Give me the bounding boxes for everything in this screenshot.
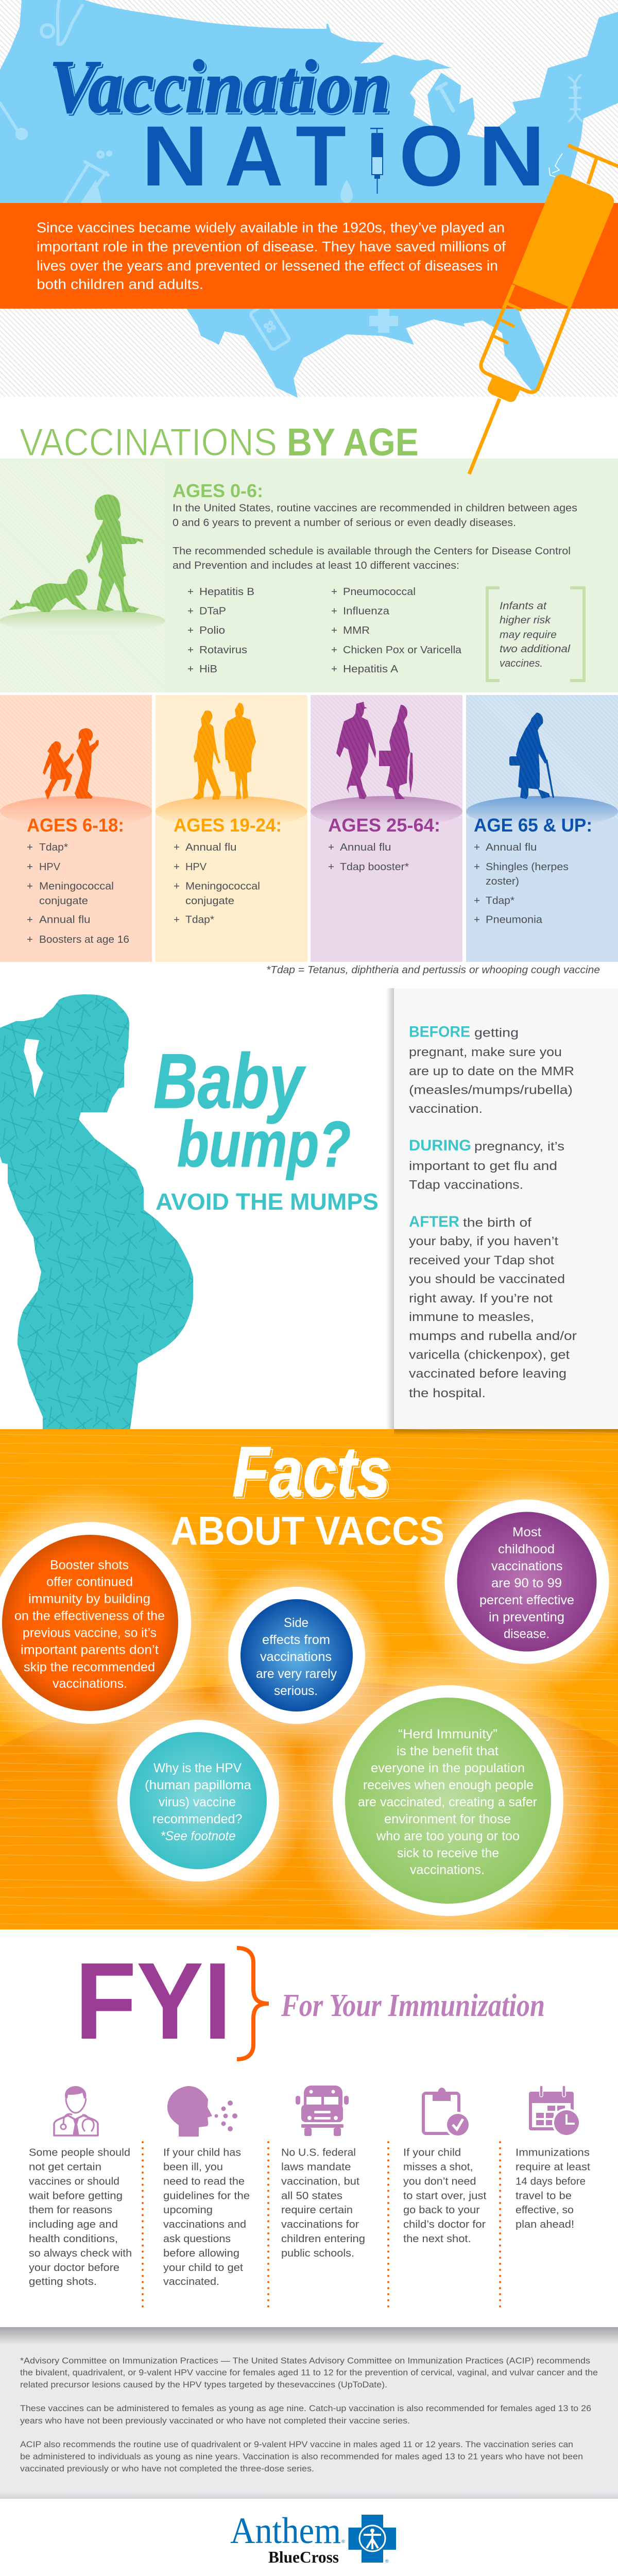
text: been ill, you [163, 2161, 223, 2173]
fact bubble: side effects: vaccinations [260, 1650, 332, 1664]
fact bubble: effectiveness: childhood [498, 1542, 555, 1556]
text: during: important to get flu and [409, 1159, 557, 1173]
brace [237, 1948, 269, 2059]
illustration: ground and children [0, 495, 165, 632]
title: NATION: A [225, 109, 283, 204]
panel: age 65 and up [466, 695, 618, 962]
list: + [27, 861, 33, 873]
callout: infants at higher risk: vaccines. [500, 657, 543, 669]
list: Tdap* [486, 894, 514, 907]
fact bubble: booster shots: previous vaccine, so it’s [23, 1626, 157, 1640]
list: Tdap* [185, 914, 214, 926]
fact bubble: HPV [117, 1720, 279, 1882]
list [27, 841, 129, 945]
text: require at least [516, 2161, 590, 2173]
text: during: DURING [409, 1137, 471, 1154]
text: after: varicella (chickenpox), get [409, 1348, 570, 1362]
list: vaccines column 1: DTaP [199, 605, 226, 617]
list: vaccines column 1: + [187, 586, 194, 598]
subheading: avoid the mumps: AVOID THE MUMPS [156, 1189, 379, 1215]
silhouette: older woman with cane [509, 713, 554, 799]
list: + [27, 914, 33, 926]
fact bubble: side effects: serious. [274, 1684, 318, 1698]
heading: facts: Facts [234, 1434, 392, 1514]
list: + [27, 841, 33, 853]
text: ACIP footnote: vaccinated previously or who have not completed the three-dose series. [20, 2464, 314, 2473]
panel: ages 0-6 [0, 459, 618, 692]
fact bubble: booster shots: immunity by building [28, 1592, 150, 1606]
illustration: large syringe [469, 145, 618, 474]
list: Boosters at age 16 [39, 934, 129, 945]
text: intro: both children and adults. [37, 276, 203, 292]
fact bubble: side effects [228, 1587, 365, 1724]
list: Tdap booster* [340, 861, 409, 873]
text: after: the birth of [463, 1216, 531, 1230]
text [403, 2147, 487, 2245]
Chesapeake bay [549, 154, 562, 177]
list: HPV [185, 861, 207, 873]
text: getting shots. [29, 2276, 97, 2287]
fact bubble: side effects: Side [284, 1616, 308, 1630]
band: orange intro [0, 203, 618, 309]
list: Annual flu [340, 841, 391, 853]
map of the United States [0, 0, 618, 398]
list: vaccines column 2: MMR [343, 624, 370, 636]
text: effective, so [516, 2204, 574, 2216]
silhouette: young adults [193, 703, 256, 800]
text: children entering [281, 2233, 365, 2245]
title: NATION: O [399, 109, 464, 204]
column: child has been ill [163, 2086, 250, 2287]
fact bubble: booster shots: on the effectiveness of the [14, 1609, 165, 1623]
text: 14 days before [516, 2176, 586, 2188]
text: before allowing [163, 2247, 239, 2259]
list: vaccines column 1: HiB [199, 663, 217, 675]
text: them for reasons [29, 2204, 112, 2216]
text: ages 0-6 description: The recommended schedule is available through the Centers for Disease Control [173, 545, 571, 557]
title: Vaccination: Vaccination [52, 47, 392, 130]
text: Immunizations [516, 2147, 590, 2159]
silhouette: two girls [43, 728, 99, 800]
fact bubble: herd immunity: vaccinations. [410, 1863, 485, 1877]
text [28, 2147, 132, 2287]
list: + [474, 861, 480, 873]
text: go back to your [403, 2204, 480, 2216]
heading: vaccinations by age: VACCINATIONS [20, 420, 277, 464]
text: your doctor before [29, 2262, 119, 2274]
list: vaccines column 1: Rotavirus [199, 644, 247, 656]
list: vaccines column 2: + [331, 644, 337, 656]
list: vaccines column 1: Polio [199, 624, 225, 636]
text: including age and [29, 2218, 118, 2230]
text: vaccinated. [163, 2276, 219, 2287]
heading: facts [233, 1447, 391, 1499]
list: + [174, 861, 180, 873]
heading: AGES 19-24: [174, 815, 282, 836]
fact bubble: herd immunity: are vaccinated, creating a safer [358, 1795, 537, 1809]
text: after: your baby, if you haven’t [409, 1234, 558, 1248]
fact bubble: effectiveness: vaccinations [491, 1559, 562, 1573]
text: before: are up to date on the MMR [409, 1064, 574, 1078]
text: intro [37, 219, 506, 292]
heading: AGES 6-18: [27, 815, 124, 836]
list: vaccines column 2: Chicken Pox or Varicella [343, 644, 462, 656]
logo: Anthem BlueCross: BlueCross [268, 2548, 339, 2566]
text: child’s doctor for [403, 2218, 486, 2230]
text: ages 0-6 description: and Prevention and includes at least 10 different vaccines: [173, 560, 459, 571]
list: conjugate [185, 895, 234, 907]
list: vaccines column 1: + [187, 663, 194, 675]
text: all 50 states [281, 2190, 342, 2202]
list: Shingles (herpes [486, 861, 569, 873]
text: vaccination, but [281, 2176, 359, 2188]
text: intro: important role in the prevention of disease. They have saved millions of [37, 239, 506, 255]
text: If your child [403, 2147, 461, 2159]
callout: infants at higher risk: Infants at [500, 600, 547, 612]
text: after: you should be vaccinated [409, 1273, 565, 1286]
list: + [174, 880, 180, 892]
heading: FYI: FYI [75, 1940, 232, 2062]
text: upcoming [163, 2204, 213, 2216]
text: after: immune to measles, [409, 1310, 534, 1324]
text: Some people should [29, 2147, 130, 2159]
fact bubble: HPV: virus) vaccine [159, 1795, 236, 1809]
column: some people [28, 2086, 132, 2287]
silhouette: adult couple [336, 702, 413, 799]
list: vaccines column 1 [187, 586, 254, 675]
title: NATION: N [141, 109, 208, 204]
heading: baby bump: bump? [177, 1109, 351, 1180]
text: you don’t need [403, 2176, 476, 2188]
decorative medical icons [0, 0, 582, 350]
text: ages 0-6 description [173, 502, 577, 571]
list: Annual flu [39, 914, 91, 926]
list: vaccines column 1: + [187, 644, 194, 656]
icon: syringe letter I [370, 128, 383, 194]
fact bubble: effectiveness [445, 1499, 609, 1664]
list: vaccines column 2: + [331, 624, 337, 636]
list: HPV [39, 861, 60, 873]
text: vaccines or should [29, 2176, 119, 2188]
fact bubble: herd immunity: “Herd Immunity” [398, 1727, 497, 1741]
fact bubble: HPV: *See footnote [161, 1829, 236, 1843]
list: + [474, 914, 480, 926]
text: before: pregnant, make sure you [409, 1045, 562, 1059]
callout: infants at higher risk: may require [500, 629, 557, 641]
fact bubble: herd immunity: everyone in the population [371, 1761, 525, 1775]
text: after [409, 1213, 577, 1400]
text [163, 2147, 250, 2287]
list: vaccines column 2: + [331, 663, 337, 675]
fact bubble: effectiveness: disease. [504, 1627, 550, 1641]
text: public schools. [281, 2247, 354, 2259]
text: during [409, 1137, 564, 1192]
list: + [474, 841, 480, 853]
text: laws mandate [281, 2161, 351, 2173]
text: after: AFTER [409, 1213, 459, 1230]
text: ACIP footnote: years who have not been previously vaccinated or who have not completed their vaccine series. [20, 2416, 410, 2426]
fact bubble: herd immunity: environment for those [384, 1812, 511, 1826]
text: ACIP footnote: These vaccines can be administered to females as young as age nine. Catch-up vaccination is also recommended for females aged 13 to 26 [20, 2403, 591, 2413]
list: vaccines column 1: Hepatitis B [199, 586, 254, 598]
fact bubble: booster shots: important parents don’t [21, 1643, 159, 1657]
fact bubble: effectiveness: are 90 to 99 [491, 1576, 562, 1590]
heading: about vaccs: ABOUT VACCS [170, 1508, 444, 1553]
list: vaccines column 2: Pneumococcal [343, 586, 416, 598]
text: after: vaccinated before leaving [409, 1367, 566, 1381]
list: Annual flu [185, 841, 237, 853]
list: zoster) [486, 875, 519, 887]
text: travel to be [516, 2190, 572, 2202]
logo: Anthem BlueCross: ® [341, 2539, 345, 2544]
heading: AGE 65 & UP: [474, 815, 592, 836]
text: before: (measles/mumps/rubella) [409, 1083, 573, 1097]
icon: head sneezing [167, 2086, 237, 2137]
text: before: BEFORE [409, 1024, 470, 1041]
text: intro: lives over the years and prevented or lessened the effect of diseases in [37, 258, 498, 274]
text: If your child has [163, 2147, 241, 2159]
fact bubble: effectiveness: in preventing [489, 1610, 564, 1624]
title: NATION [141, 109, 545, 204]
fact bubble: effectiveness: Most [512, 1525, 541, 1539]
text: require certain [281, 2204, 353, 2216]
list [474, 841, 569, 926]
list: Meningococcal [185, 880, 260, 892]
list: + [328, 841, 334, 853]
panel: ages 6-18 [0, 695, 152, 962]
text: after: right away. If you’re not [409, 1292, 553, 1306]
panel: pregnancy guidance [386, 988, 618, 1429]
fact bubble: herd immunity: who are too young or too [376, 1829, 520, 1843]
list: vaccines column 2 [331, 586, 462, 675]
list: Meningococcal [39, 880, 114, 892]
text [281, 2147, 365, 2259]
icon: school bus [296, 2086, 349, 2136]
icon: medical cross [369, 309, 398, 333]
fact bubble: HPV: (human papilloma [145, 1778, 251, 1792]
fact bubble: herd immunity: is the benefit that [397, 1744, 499, 1758]
text: your child to get [163, 2262, 243, 2274]
title: NATION: T [296, 109, 346, 204]
text: after: the hospital. [409, 1386, 486, 1400]
panel: ages 19-24 [156, 695, 307, 962]
text: need to read the [163, 2176, 245, 2188]
text [516, 2147, 590, 2230]
list: conjugate [39, 895, 88, 907]
footnote: Tdap definition: *Tdap = Tetanus, diphtheria and pertussis or whooping cough vaccine [266, 964, 600, 976]
text: the next shot. [403, 2233, 471, 2245]
heading: AGES 25-64: [328, 815, 440, 836]
fact bubble: HPV: Why is the HPV [153, 1761, 242, 1775]
fact bubble: side effects: are very rarely [256, 1667, 337, 1681]
fact bubble: booster shots [0, 1522, 191, 1724]
panel: ages 25-64 [311, 695, 462, 962]
heading: ages 0-6: AGES 0-6: [173, 480, 263, 501]
title: NATION: N [478, 109, 545, 204]
panel: hero [0, 0, 618, 398]
text: ACIP footnote: be administered to individuals as young as nine years. Vaccination is also recommended for males aged 13 to 21 years who have not been [20, 2452, 583, 2462]
fact bubble: booster shots: offer continued [46, 1574, 133, 1589]
icon: doctor [54, 2086, 98, 2136]
text: so always check with [29, 2247, 132, 2259]
text: during: Tdap vaccinations. [409, 1178, 523, 1192]
text: ACIP footnote: ACIP also recommends the routine use of quadrivalent or 9-valent HPV vaccine in males aged 11 or 12 years. The vaccination series can [20, 2439, 573, 2449]
list: + [328, 861, 334, 873]
title: Vaccination: Vaccination [49, 45, 390, 128]
text: health conditions, [29, 2233, 118, 2245]
heading: vaccinations by age: BY AGE [287, 420, 419, 464]
logo: Anthem BlueCross: Anthem [230, 2510, 341, 2551]
list: vaccines column 1: + [187, 624, 194, 636]
text: ACIP footnote [20, 2355, 598, 2473]
text: to start over, just [403, 2190, 487, 2202]
column: travel [516, 2086, 590, 2230]
icon: clipboard with check [423, 2088, 471, 2138]
fact bubble: herd immunity: sick to receive the [397, 1846, 499, 1860]
text: ACIP footnote: the bivalent, quadrivalent, or 9-valent HPV vaccine for females aged 11 to 12 for the prevention of cervical, vaginal, and vulvar cancer and the [20, 2368, 598, 2378]
callout: infants at higher risk: two additional [500, 643, 571, 655]
heading: baby bump [153, 1038, 351, 1180]
list: + [174, 841, 180, 853]
fact bubble: booster shots: skip the recommended [24, 1660, 155, 1674]
text: No U.S. federal [281, 2147, 356, 2159]
text: misses a shot, [403, 2161, 473, 2173]
text: wait before getting [28, 2190, 123, 2202]
column: missed shot [403, 2088, 487, 2245]
text: ACIP footnote: related precursor lesions caused by the HPV types targeted by thesevaccines (UpToDate). [20, 2380, 387, 2389]
column: federal laws [281, 2086, 365, 2259]
text: plan ahead! [516, 2218, 574, 2230]
fact bubble: herd immunity [333, 1685, 563, 1916]
panel: facts about vaccs [0, 1429, 618, 1929]
text: ages 0-6 description: In the United States, routine vaccines are recommended in children between ages [173, 502, 577, 514]
text: after: received your Tdap shot [409, 1253, 554, 1267]
text: during: pregnancy, it’s [474, 1140, 564, 1154]
list: + [174, 914, 180, 926]
list [328, 841, 409, 873]
list: vaccines column 2: + [331, 605, 337, 617]
text: before [409, 1024, 574, 1116]
illustration: pregnant woman silhouette [0, 994, 193, 1429]
text: ask questions [163, 2233, 231, 2245]
callout: infants at higher risk: higher risk [500, 614, 552, 626]
heading: facts: Facts [232, 1432, 390, 1512]
list: Pneumonia [486, 914, 543, 926]
fact bubble: booster shots: vaccinations. [53, 1676, 127, 1691]
callout: infants at higher risk [487, 588, 584, 681]
fact bubble: booster shots: Booster shots [50, 1558, 129, 1572]
heading: baby bump: Baby [153, 1038, 306, 1124]
list: + [474, 894, 480, 907]
subheading: for your immunization: For Your Immunization [281, 1988, 545, 2023]
list: vaccines column 2: Hepatitis A [343, 663, 398, 675]
text: intro: Since vaccines became widely available in the 1920s, they’ve played an [37, 219, 505, 235]
text: before: vaccination. [409, 1102, 483, 1116]
title: Vaccination: Vaccination [50, 46, 391, 129]
text: not get certain [29, 2161, 101, 2173]
panel: footnote [0, 2327, 618, 2499]
list: Tdap* [39, 841, 68, 853]
text: guidelines for the [163, 2190, 250, 2202]
text: before: getting [474, 1026, 519, 1040]
fact bubble: HPV: recommended? [152, 1812, 242, 1826]
list [174, 841, 260, 926]
list: vaccines column 2: Influenza [343, 605, 390, 617]
fact bubble: herd immunity: receives when enough people [363, 1778, 534, 1792]
list: + [27, 880, 33, 892]
list: vaccines column 1: + [187, 605, 194, 617]
logo: Anthem BlueCross: ® [385, 2558, 389, 2564]
fact bubble: side effects: effects from [262, 1633, 330, 1647]
list: vaccines column 2: + [331, 586, 337, 598]
text: vaccinations for [281, 2218, 359, 2230]
list: Annual flu [486, 841, 537, 853]
text: after: mumps and rubella and/or [409, 1329, 577, 1343]
logo: Anthem BlueCross [230, 2510, 396, 2566]
fact bubble: effectiveness: percent effective [479, 1593, 574, 1607]
text: vaccinations and [163, 2218, 246, 2230]
text: ACIP footnote: *Advisory Committee on Immunization Practices — The United States Advisory Committee on Immunization Practices (ACIP) recommends [20, 2355, 590, 2365]
icon: calendar with clock [529, 2086, 581, 2137]
text: ages 0-6 description: 0 and 6 years to prevent a number of serious or even deadly diseases. [173, 517, 516, 529]
list: + [27, 934, 33, 945]
